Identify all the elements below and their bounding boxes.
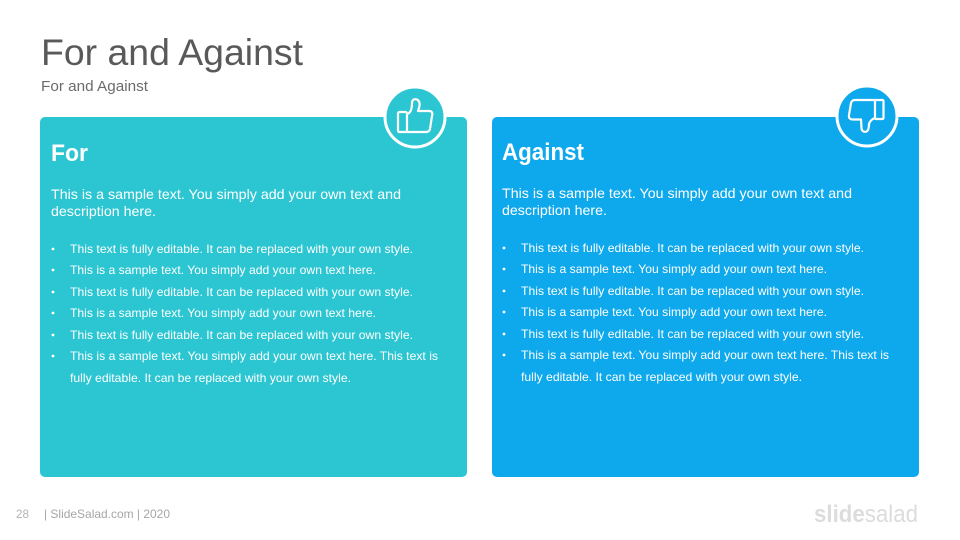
bullet list: for	[52, 242, 438, 385]
bullet list: for: This is a sample text. You simply add your own text here.	[70, 306, 376, 320]
bullet list: for: This text is fully editable. It can be replaced with your own style.	[70, 285, 413, 299]
bullet list: against: This is a sample text. You simply add your own text here.	[521, 262, 827, 276]
page number: 28	[16, 507, 29, 521]
bullet list: against: This is a sample text. You simply add your own text here. This text is	[521, 348, 889, 362]
bullet list: against: This is a sample text. You simply add your own text here.	[521, 305, 827, 319]
bullet list: against	[503, 241, 889, 384]
bullet list: against: This text is fully editable. It can be replaced with your own style.	[521, 284, 864, 298]
text block: for description: description here.	[51, 203, 156, 219]
text block: against description	[502, 185, 852, 218]
bullet list: for: fully editable. It can be replaced with your own style.	[70, 371, 351, 385]
bullet list: for: This is a sample text. You simply add your own text here. This text is	[70, 349, 438, 363]
icon: thumbs up	[385, 87, 445, 147]
text block: for description: This is a sample text. You simply add your own text and	[51, 186, 401, 202]
heading: for: For	[51, 140, 88, 167]
bullet list: for: This text is fully editable. It can be replaced with your own style.	[70, 242, 413, 256]
bullet list: for: This text is fully editable. It can be replaced with your own style.	[70, 328, 413, 342]
footer text: | SlideSalad.com | 2020	[44, 507, 170, 521]
icon: thumbs down	[837, 86, 897, 146]
logo: slidesalad: slidesalad	[814, 501, 918, 528]
subtitle: For and Against	[41, 78, 149, 95]
bullet list: against: This text is fully editable. It can be replaced with your own style.	[521, 241, 864, 255]
bullet list: for: This is a sample text. You simply add your own text here.	[70, 263, 376, 277]
bullet list: against: This text is fully editable. It can be replaced with your own style.	[521, 327, 864, 341]
text block: against description: description here.	[502, 202, 607, 218]
text block: for description	[51, 186, 401, 219]
text block: against description: This is a sample text. You simply add your own text and	[502, 185, 852, 201]
title: For and Against	[41, 32, 304, 73]
panel: for	[40, 117, 467, 477]
bullet list: against: fully editable. It can be replaced with your own style.	[521, 370, 802, 384]
heading: against: Against	[502, 139, 584, 166]
panel: against	[492, 117, 919, 477]
